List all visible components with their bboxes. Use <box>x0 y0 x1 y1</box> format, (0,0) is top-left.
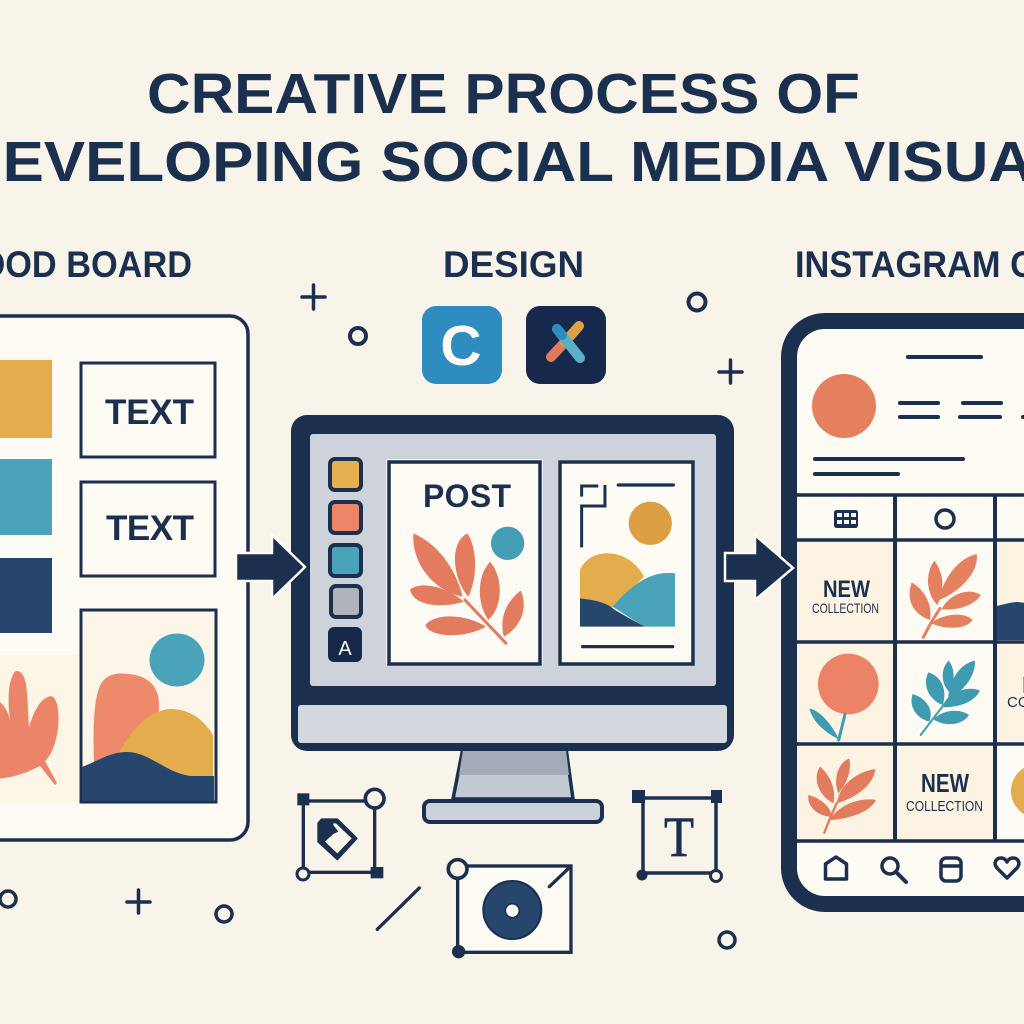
tile: new collection 1: COLLECTION <box>812 600 879 616</box>
tile: flower <box>809 654 879 740</box>
palette: font A: A <box>338 638 352 660</box>
arrow: mood board to design <box>236 535 305 599</box>
selection frame: text icon <box>632 790 722 882</box>
selection frame: image icon <box>377 860 571 958</box>
title <box>0 62 1024 194</box>
post card 1 <box>387 460 542 665</box>
palette: coral <box>330 502 361 533</box>
swatch: navy <box>0 558 52 633</box>
icon: heart <box>995 858 1019 878</box>
monitor <box>291 415 734 822</box>
icon: grid tab <box>834 510 858 528</box>
palette: teal <box>330 545 361 576</box>
tile: new collection 1 <box>812 576 879 616</box>
palette: font A <box>328 627 362 662</box>
monitor stand <box>453 748 573 799</box>
icon: circle tab <box>936 510 954 528</box>
palette: grey <box>331 586 361 617</box>
decor: plus top left <box>302 285 325 309</box>
decor: circle bottom left <box>0 891 16 907</box>
icon: canva style app: C <box>440 314 482 378</box>
monitor screen <box>310 434 716 686</box>
swatch: teal <box>0 459 52 535</box>
tile: new collection 2 <box>906 768 983 815</box>
decor: circle bottom <box>216 906 232 922</box>
text box 1 <box>81 363 215 457</box>
decor: circle top left <box>350 328 366 344</box>
profile text lines <box>815 357 1024 474</box>
icon: x app <box>526 306 606 384</box>
arrow: design to instagram <box>725 535 793 600</box>
text box 2: TEXT <box>106 509 194 548</box>
post leaf <box>410 527 524 643</box>
swatch: gold <box>0 360 52 438</box>
monitor body <box>291 415 734 751</box>
icon: search <box>882 858 906 882</box>
tile: teal leaf <box>911 661 980 735</box>
tile: new collection 1: NEW <box>823 576 870 603</box>
panel: mood board <box>0 316 248 840</box>
text box 2 <box>81 482 215 576</box>
title: CREATIVE PROCESS OF <box>147 62 860 126</box>
palette: gold <box>330 459 361 490</box>
post card 2 <box>558 460 695 665</box>
post card 1: POST <box>423 478 511 514</box>
tile: landscape partial <box>997 602 1024 640</box>
icon: bag <box>941 858 961 881</box>
selection frame: text icon: T <box>664 806 694 869</box>
heading: design: DESIGN <box>443 244 584 285</box>
tile: gold circle partial <box>1011 764 1024 818</box>
tile: new collection 2: NEW <box>921 768 969 798</box>
grid tiles <box>797 541 1024 840</box>
decor: circle top right <box>688 294 706 310</box>
decor: plus top right <box>719 360 742 383</box>
phone: instagram grid <box>789 321 1024 904</box>
icon: canva style app <box>422 306 502 384</box>
leaf tile <box>0 655 79 802</box>
tile: coral leaf <box>910 554 981 637</box>
selection frame: tag icon <box>297 789 384 880</box>
decor: plus bottom left <box>127 890 150 913</box>
image card <box>81 610 216 802</box>
tile: new collection 2: COLLECTION <box>906 798 983 815</box>
profile avatar <box>812 374 876 438</box>
tile: new collection partial <box>1007 672 1024 711</box>
decor: circle bottom right <box>719 932 735 948</box>
grid lines <box>797 495 1024 841</box>
monitor base <box>424 801 602 822</box>
icon: home outline <box>826 857 846 879</box>
tile: coral leaf 2 <box>808 758 876 833</box>
text box 1: TEXT <box>105 393 194 432</box>
